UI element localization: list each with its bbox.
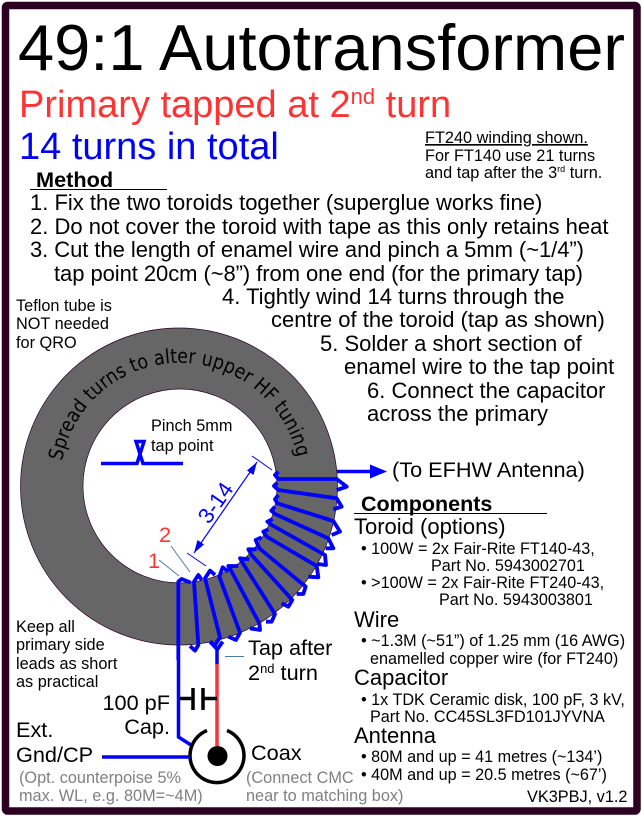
subtitle: total turns: 14 turns in total — [19, 126, 279, 168]
note: teflon tube — [16, 297, 112, 352]
note: short primary leads — [16, 618, 118, 691]
coax connector symbol — [190, 730, 244, 783]
ground wire — [102, 755, 190, 759]
method steps: 1. Fix the two toroids together (superglue works fine) — [30, 190, 542, 215]
pinch tap point label: tap point — [151, 437, 214, 455]
label: tap after 2nd turn: 2 — [248, 660, 260, 685]
title: 49:1 Autotransformer — [18, 11, 625, 84]
panel: components — [354, 492, 625, 784]
label: tap after 2nd turn: turn — [275, 660, 318, 685]
toroid options: Part No. 5943003801 — [439, 591, 593, 609]
version credit: VK3PBJ, v1.2 — [527, 788, 627, 806]
subtitle: primary tap: Primary tapped at 2 — [19, 84, 351, 126]
note: short primary leads: as practical — [16, 673, 98, 691]
ground label: Ext. — [16, 717, 53, 742]
subtitle: primary tap: nd — [351, 84, 375, 109]
note: teflon tube: Teflon tube is — [16, 297, 112, 315]
curved label on toroid: Spread turns to alter upper HF tuning — [48, 348, 308, 460]
toroid options: Part No. 5943002701 — [431, 557, 585, 575]
icon: pinched wire — [101, 442, 183, 464]
note: teflon tube: NOT needed — [16, 315, 109, 333]
toroid options — [354, 514, 604, 609]
pinch tap point label — [151, 417, 232, 455]
capacitor details: Part No. CC45SL3FD101JYVNA — [370, 708, 605, 726]
toroid options: Toroid (options) — [354, 514, 506, 539]
counterpoise note: (Opt. counterpoise 5% — [19, 769, 181, 787]
label: turn 2 — [159, 522, 190, 572]
coax note: near to matching box) — [246, 787, 403, 805]
label: turn 2: 2 — [159, 522, 171, 547]
method steps: 2. Do not cover the toroid with tape as this only retains heat — [30, 214, 608, 239]
note: FT240 versus FT140 winding — [425, 129, 602, 182]
capacitor details — [354, 665, 625, 726]
tap lead wire — [215, 648, 219, 746]
method steps: 5. Solder a short section of — [320, 331, 583, 356]
antenna details: • 40M and up = 20.5 metres (~67’) — [361, 766, 607, 784]
capacitor label: Cap. — [124, 714, 170, 739]
note: FT240 versus FT140 winding: rd — [557, 164, 565, 174]
label: tap after 2nd turn: nd — [260, 661, 275, 676]
primary lead wire — [178, 660, 191, 745]
method steps: 3. Cut the length of enamel wire and pinch a 5mm (~1/4”) — [30, 237, 584, 262]
winding: 14 turns — [178, 472, 347, 660]
pinch tap point label: Pinch 5mm — [151, 417, 232, 435]
coax note: (Connect CMC — [246, 769, 354, 787]
coax note — [246, 769, 403, 805]
note: FT240 versus FT140 winding: and tap after the 3 — [425, 164, 557, 182]
label: turn 1: 1 — [148, 548, 160, 573]
method steps: 6. Connect the capacitor — [367, 378, 605, 403]
wire details: Wire — [354, 607, 399, 632]
ground label: Gnd/CP — [16, 742, 93, 767]
counterpoise note — [19, 769, 203, 805]
capacitor label — [102, 690, 170, 739]
heading: method: Method — [36, 167, 113, 192]
capacitor details: Capacitor — [354, 665, 448, 690]
note: short primary leads: leads as short — [16, 655, 118, 673]
wire details — [354, 607, 625, 668]
wire details: • ~1.3M (~51”) of 1.25 mm (16 AWG) — [361, 632, 625, 650]
method steps: enamel wire to the tap point — [344, 354, 614, 379]
note: short primary leads: Keep all — [16, 618, 75, 636]
label: turn 1 — [148, 548, 179, 576]
note: teflon tube: for QRO — [16, 334, 77, 352]
label: to EFHW antenna: (To EFHW Antenna) — [392, 457, 585, 482]
antenna details — [354, 723, 607, 784]
dimension: turns 3-14 — [187, 456, 272, 566]
antenna details: • 80M and up = 41 metres (~134’) — [361, 748, 602, 766]
ground label — [16, 717, 93, 767]
toroid options: • 100W = 2x Fair-Rite FT140-43, — [361, 540, 595, 558]
heading: components: Components — [361, 492, 492, 516]
label: tap after 2nd turn: Tap after — [248, 635, 332, 660]
note: FT240 versus FT140 winding: turn. — [565, 164, 602, 182]
method steps: centre of the toroid (tap as shown) — [271, 307, 605, 332]
label: tap after 2nd turn — [225, 635, 332, 685]
arrow: to EFHW antenna — [337, 464, 387, 478]
note: FT240 versus FT140 winding: For FT140 use 21 turns — [425, 147, 595, 165]
antenna details: Antenna — [354, 723, 437, 748]
capacitor details: • 1x TDK Ceramic disk, 100 pF, 3 kV, — [361, 691, 625, 709]
capacitor symbol — [180, 688, 217, 710]
toroid options: • >100W = 2x Fair-Rite FT240-43, — [361, 574, 604, 592]
wire details: enamelled copper wire (for FT240) — [370, 650, 618, 668]
capacitor label: 100 pF — [102, 690, 170, 715]
heading: method — [30, 167, 167, 192]
counterpoise note: max. WL, e.g. 80M=~4M) — [19, 787, 203, 805]
method steps: tap point 20cm (~8”) from one end (for the primary tap) — [54, 261, 583, 286]
toroid core — [20, 328, 338, 645]
note: FT240 versus FT140 winding: FT240 winding shown. — [425, 129, 588, 147]
method steps: across the primary — [367, 401, 548, 426]
note: short primary leads: primary side — [16, 636, 105, 654]
subtitle: primary tap: turn — [375, 84, 451, 126]
method steps — [30, 190, 614, 426]
coax label: Coax — [251, 740, 302, 765]
method steps: 4. Tightly wind 14 turns through the — [222, 284, 564, 309]
dimension: turns 3-14: 3-14 — [193, 477, 238, 528]
